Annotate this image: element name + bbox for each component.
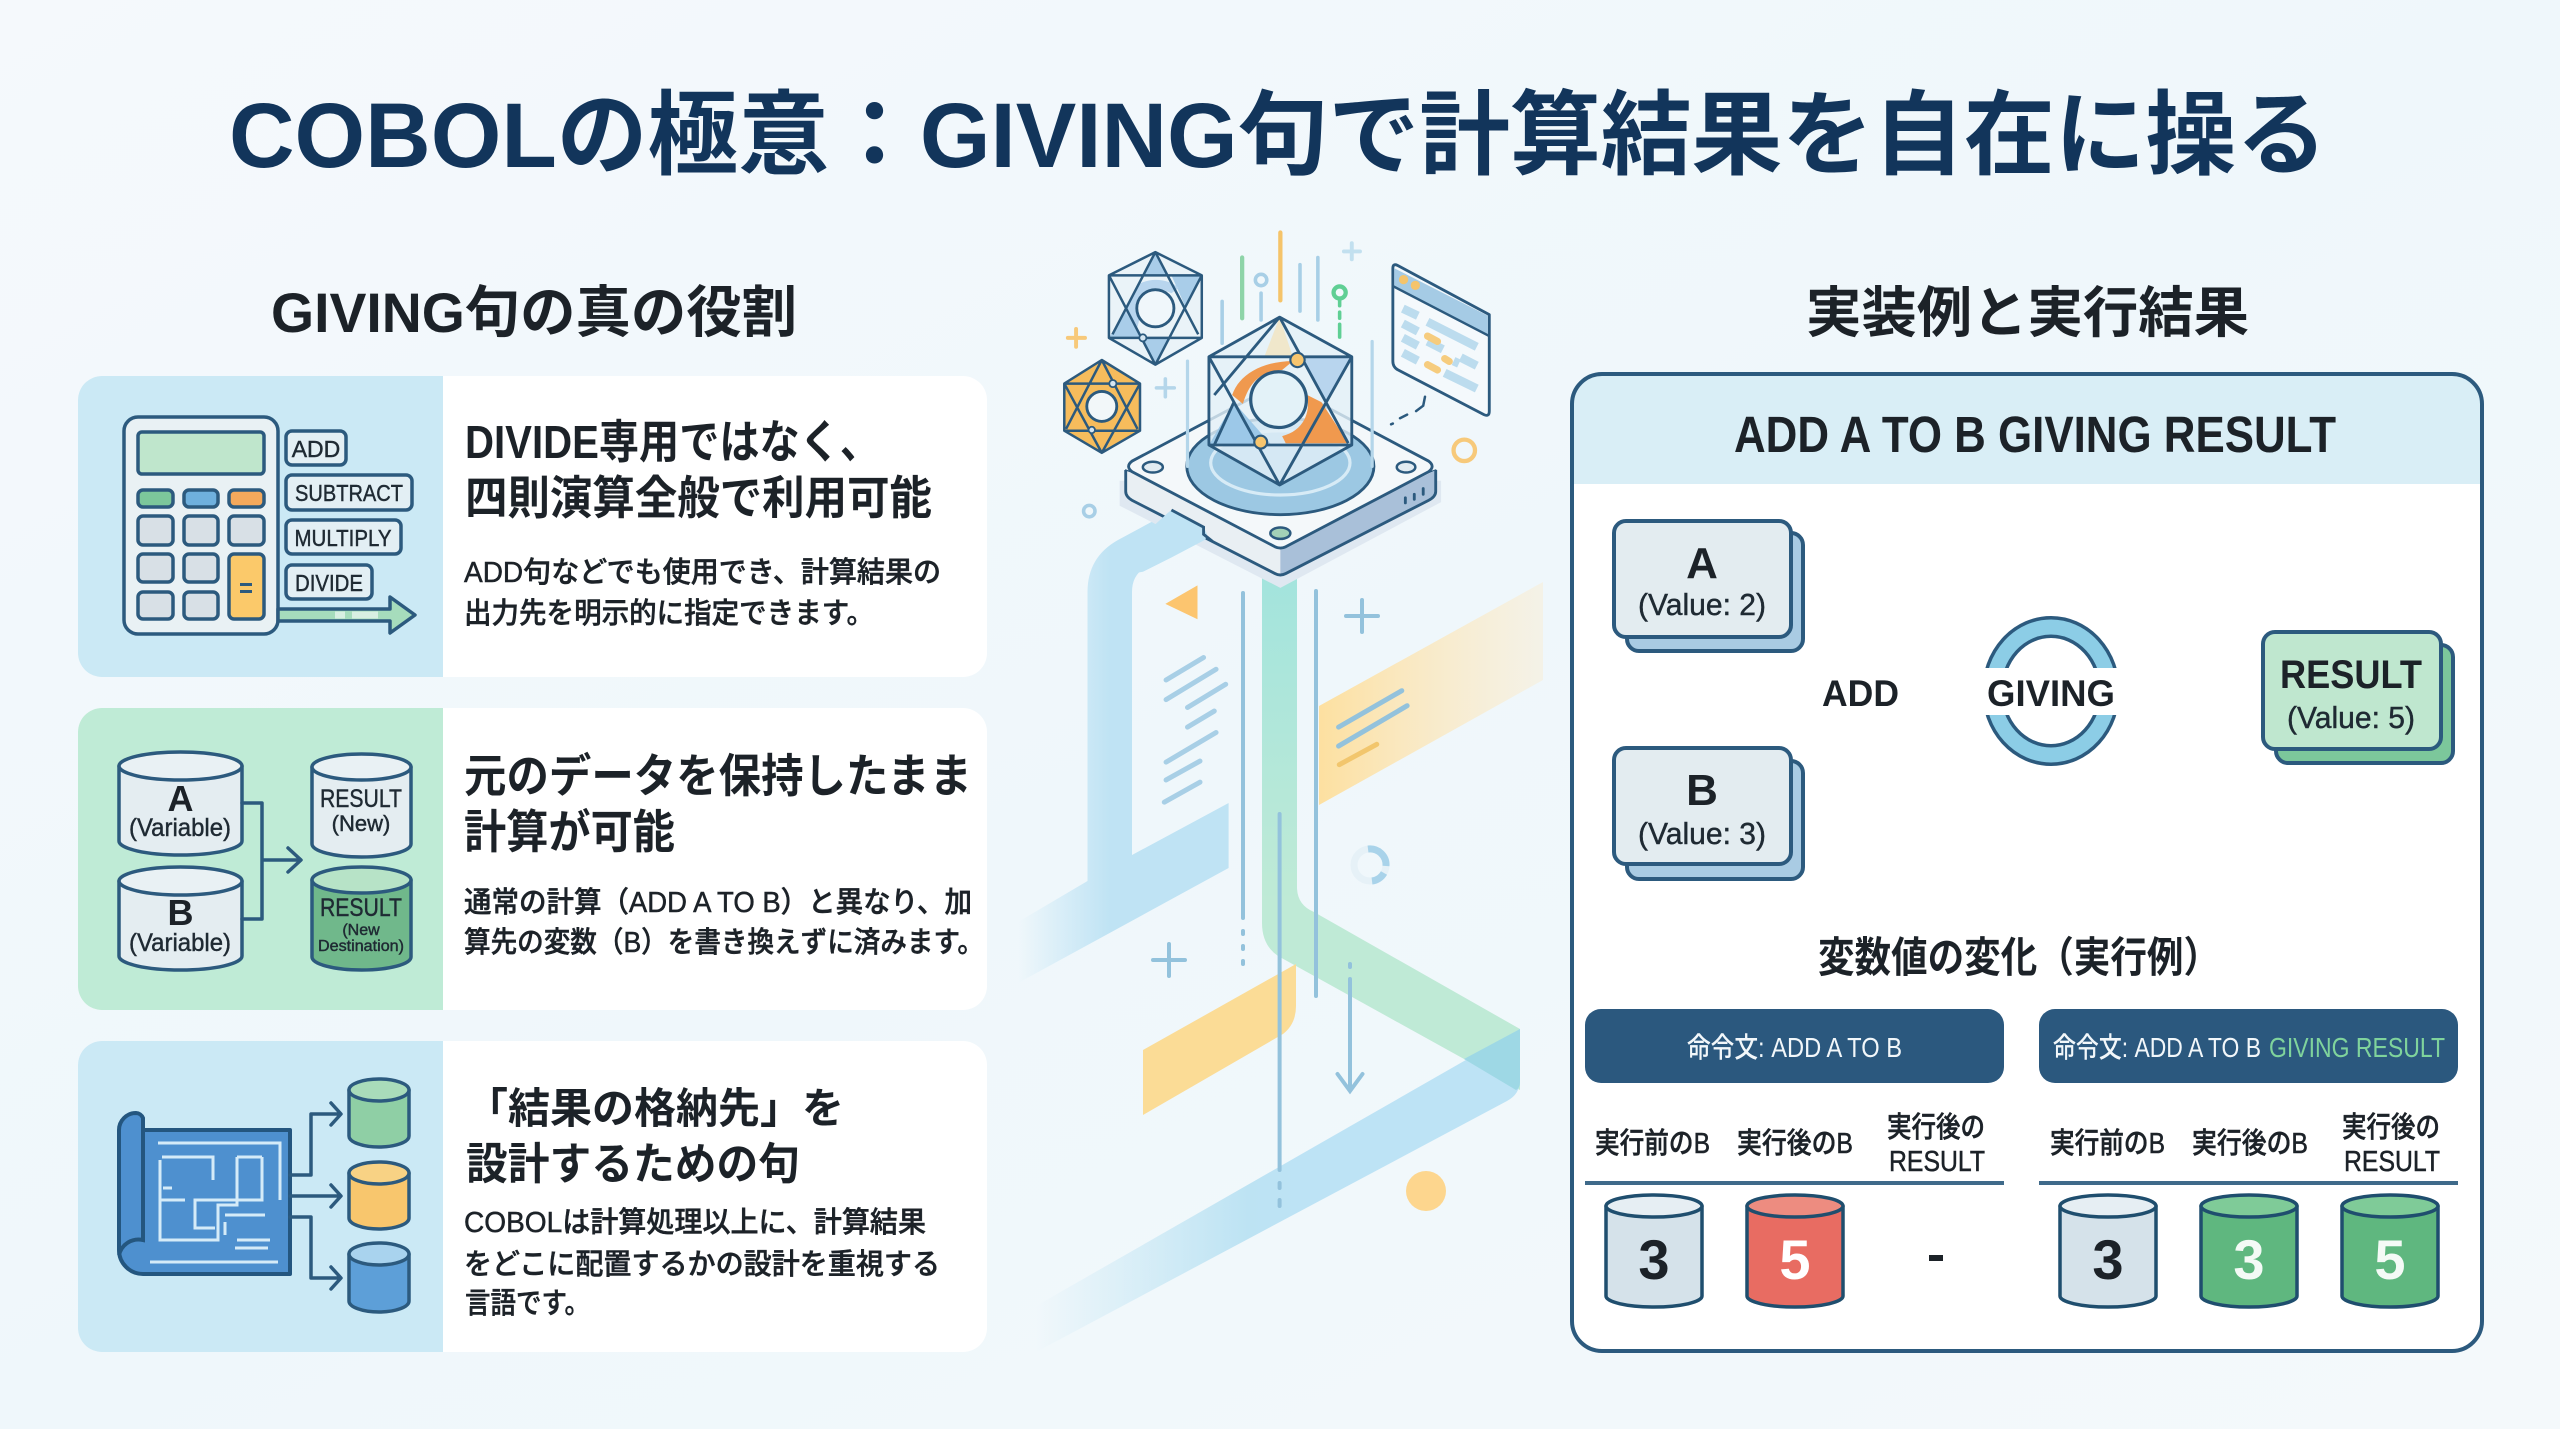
- result card: RESULT: [2280, 653, 2422, 697]
- blue pipe notch: [1129, 510, 1207, 574]
- command text: 命令文: ADD A TO B: [1687, 1032, 1902, 1063]
- icon: RESULT new: [312, 754, 411, 857]
- cylinder: before B: 3: [1638, 1228, 1670, 1291]
- panel: card 2: [78, 708, 987, 1010]
- card 1 body: [464, 556, 941, 630]
- card 1 body: 出力先を明示的に指定できます。: [464, 597, 874, 630]
- command pill: [2039, 1009, 2458, 1083]
- cylinder: after B: 5: [1779, 1228, 1811, 1291]
- variable card A: [1614, 521, 1803, 651]
- card 1 heading: DIVIDE専用ではなく、: [465, 416, 880, 468]
- operation labels: DIVIDE: [295, 570, 363, 596]
- icon: RESULT new destination: Destination): [318, 938, 404, 955]
- ribbon: lower blue: [1036, 1029, 1520, 1352]
- GIVING ring: GIVING: [1987, 673, 2115, 714]
- ribbon: lower yellow: [1143, 964, 1296, 1115]
- card 1 image background: [78, 376, 443, 677]
- document lines: [1164, 657, 1226, 802]
- icon: RESULT new destination: RESULT: [320, 894, 402, 922]
- icon: blue crystal: [1109, 252, 1202, 365]
- column headers: 実行後のB: [2192, 1127, 2308, 1160]
- icon: green storage: [349, 1079, 409, 1147]
- column headers: [2050, 1111, 2440, 1178]
- GIVING ring: [1980, 627, 2122, 755]
- cylinder: before B: [1606, 1195, 1702, 1307]
- cylinder: after RESULT: [2342, 1195, 2438, 1307]
- column headers: 実行後の: [2342, 1111, 2440, 1144]
- operation labels: ADD: [292, 436, 340, 462]
- cylinder: after B: 3: [2233, 1228, 2265, 1291]
- cylinder: after B: [2201, 1195, 2297, 1307]
- ribbon overlap: [1464, 1029, 1520, 1090]
- icon: blueprint: [119, 1113, 290, 1274]
- title: COBOLの極意：GIVING句で計算結果を自在に操る: [229, 85, 2327, 187]
- card 2 heading: [464, 750, 972, 858]
- icon: variable B: [119, 867, 242, 970]
- cylinder: before B: 3: [2092, 1228, 2124, 1291]
- card 3 heading: [466, 1085, 844, 1189]
- icon: orange dot: [1406, 1171, 1446, 1211]
- icon: RESULT new: RESULT: [320, 785, 402, 813]
- card 1 heading: 四則演算全般で利用可能: [465, 472, 932, 524]
- ribbon: green pipe: [1262, 577, 1520, 1090]
- panel header: [1572, 374, 2482, 484]
- code statement: ADD A TO B GIVING RESULT: [1734, 406, 2336, 463]
- card 3 heading: 「結果の格納先」を: [466, 1085, 844, 1132]
- yellow ribbon lines: [1339, 691, 1407, 746]
- panel: card 1: [78, 376, 987, 677]
- orange triangle: [1165, 585, 1197, 619]
- operation labels: MULTIPLY: [294, 525, 392, 551]
- cylinder: before B: [2060, 1195, 2156, 1307]
- table: ADD A TO B GIVING RESULT: [2039, 1009, 2458, 1307]
- central illustration: [1018, 232, 1543, 1352]
- icon: variable A: [119, 752, 242, 855]
- arrow: merge into result: [242, 803, 301, 919]
- column headers: RESULT: [1889, 1146, 1985, 1178]
- operation labels: SUBTRACT: [295, 480, 403, 506]
- dashed connector: [1391, 397, 1425, 424]
- platform: [1120, 382, 1441, 588]
- card 3 image background: [78, 1041, 443, 1352]
- icon: code window: [1393, 265, 1489, 415]
- card 2 body: [464, 886, 984, 959]
- icon: output arrow: [278, 597, 415, 633]
- column headers: [1595, 1111, 1985, 1178]
- card 1 heading: [465, 416, 932, 524]
- panel: card 3: [78, 1041, 987, 1352]
- result card: (Value: 5): [2287, 700, 2415, 735]
- upper illustration, drawn in zoom coordinates: [1064, 232, 1489, 802]
- heading: left column: GIVING句の真の役割: [271, 281, 797, 344]
- variable card A: A: [1686, 539, 1718, 588]
- column headers: 実行前のB: [1595, 1127, 1710, 1160]
- ADD operator: ADD: [1822, 673, 1899, 714]
- heading: right column: 実装例と実行結果: [1806, 282, 2249, 344]
- operation labels: [286, 431, 412, 599]
- variable card B: (Value: 3): [1638, 816, 1766, 851]
- card 3 body: COBOLは計算処理以上に、計算結果: [464, 1206, 926, 1239]
- variable card B: [1614, 748, 1803, 879]
- icon: variable B: B: [168, 892, 194, 933]
- icon: main crystal: [1209, 317, 1352, 485]
- result card: [2263, 632, 2453, 763]
- arrows: to storage: [290, 1103, 341, 1289]
- guide lines: [1153, 591, 1378, 1206]
- icon: blue storage: [349, 1243, 409, 1312]
- icon: variable A: (Variable): [129, 814, 231, 842]
- icon: RESULT new: (New): [332, 811, 390, 836]
- variable card A: (Value: 2): [1638, 587, 1766, 622]
- card 2 heading: 計算が可能: [464, 806, 675, 858]
- icon: calculator: [124, 417, 278, 634]
- column headers: RESULT: [2344, 1146, 2440, 1178]
- card 3 body: 言語です。: [465, 1288, 590, 1320]
- icon: orange crystal: [1064, 360, 1140, 453]
- variable card B: B: [1686, 766, 1718, 815]
- card 2 body: 算先の変数（B）を書き換えずに済みます。: [464, 926, 984, 959]
- command text: GIVING RESULT: [2269, 1032, 2445, 1063]
- cylinder: after RESULT: 5: [2374, 1228, 2406, 1291]
- card 2 body: 通常の計算（ADD A TO B）と異なり、加: [464, 886, 972, 919]
- glass columns: [1187, 341, 1372, 466]
- no result: [1929, 1255, 1943, 1261]
- column headers: 実行前のB: [2050, 1127, 2165, 1160]
- icon: yellow storage: [349, 1162, 409, 1229]
- icon: RESULT new destination: [312, 867, 411, 970]
- subheading: variable change: 変数値の変化（実行例）: [1818, 934, 2220, 981]
- table: ADD A TO B: [1585, 1009, 2004, 1307]
- sparks: [1068, 232, 1475, 517]
- card 2 image background: [78, 708, 443, 1010]
- icon: variable A: A: [168, 778, 194, 819]
- card 3 body: をどこに配置するかの設計を重視する: [464, 1248, 940, 1281]
- icon: RESULT new destination: (New: [342, 922, 380, 939]
- icon: partial ring: [1354, 849, 1386, 881]
- card 3 heading: 設計するための句: [466, 1140, 800, 1189]
- column headers: 実行後のB: [1737, 1127, 1853, 1160]
- column headers: 実行後の: [1887, 1111, 1985, 1144]
- panel: implementation example: [1572, 374, 2482, 1351]
- icon: variable B: (Variable): [129, 929, 231, 957]
- ribbon: upper yellow: [1319, 582, 1543, 805]
- cylinder: after B: [1747, 1195, 1843, 1307]
- card 2 heading: 元のデータを保持したまま: [464, 750, 972, 802]
- command text: 命令文: ADD A TO B: [2053, 1032, 2261, 1063]
- card 1 body: ADD句などでも使用でき、計算結果の: [464, 556, 941, 589]
- card 3 body: [464, 1206, 940, 1320]
- command pill: [1585, 1009, 2004, 1083]
- ribbon: blue pipe: [1018, 513, 1229, 983]
